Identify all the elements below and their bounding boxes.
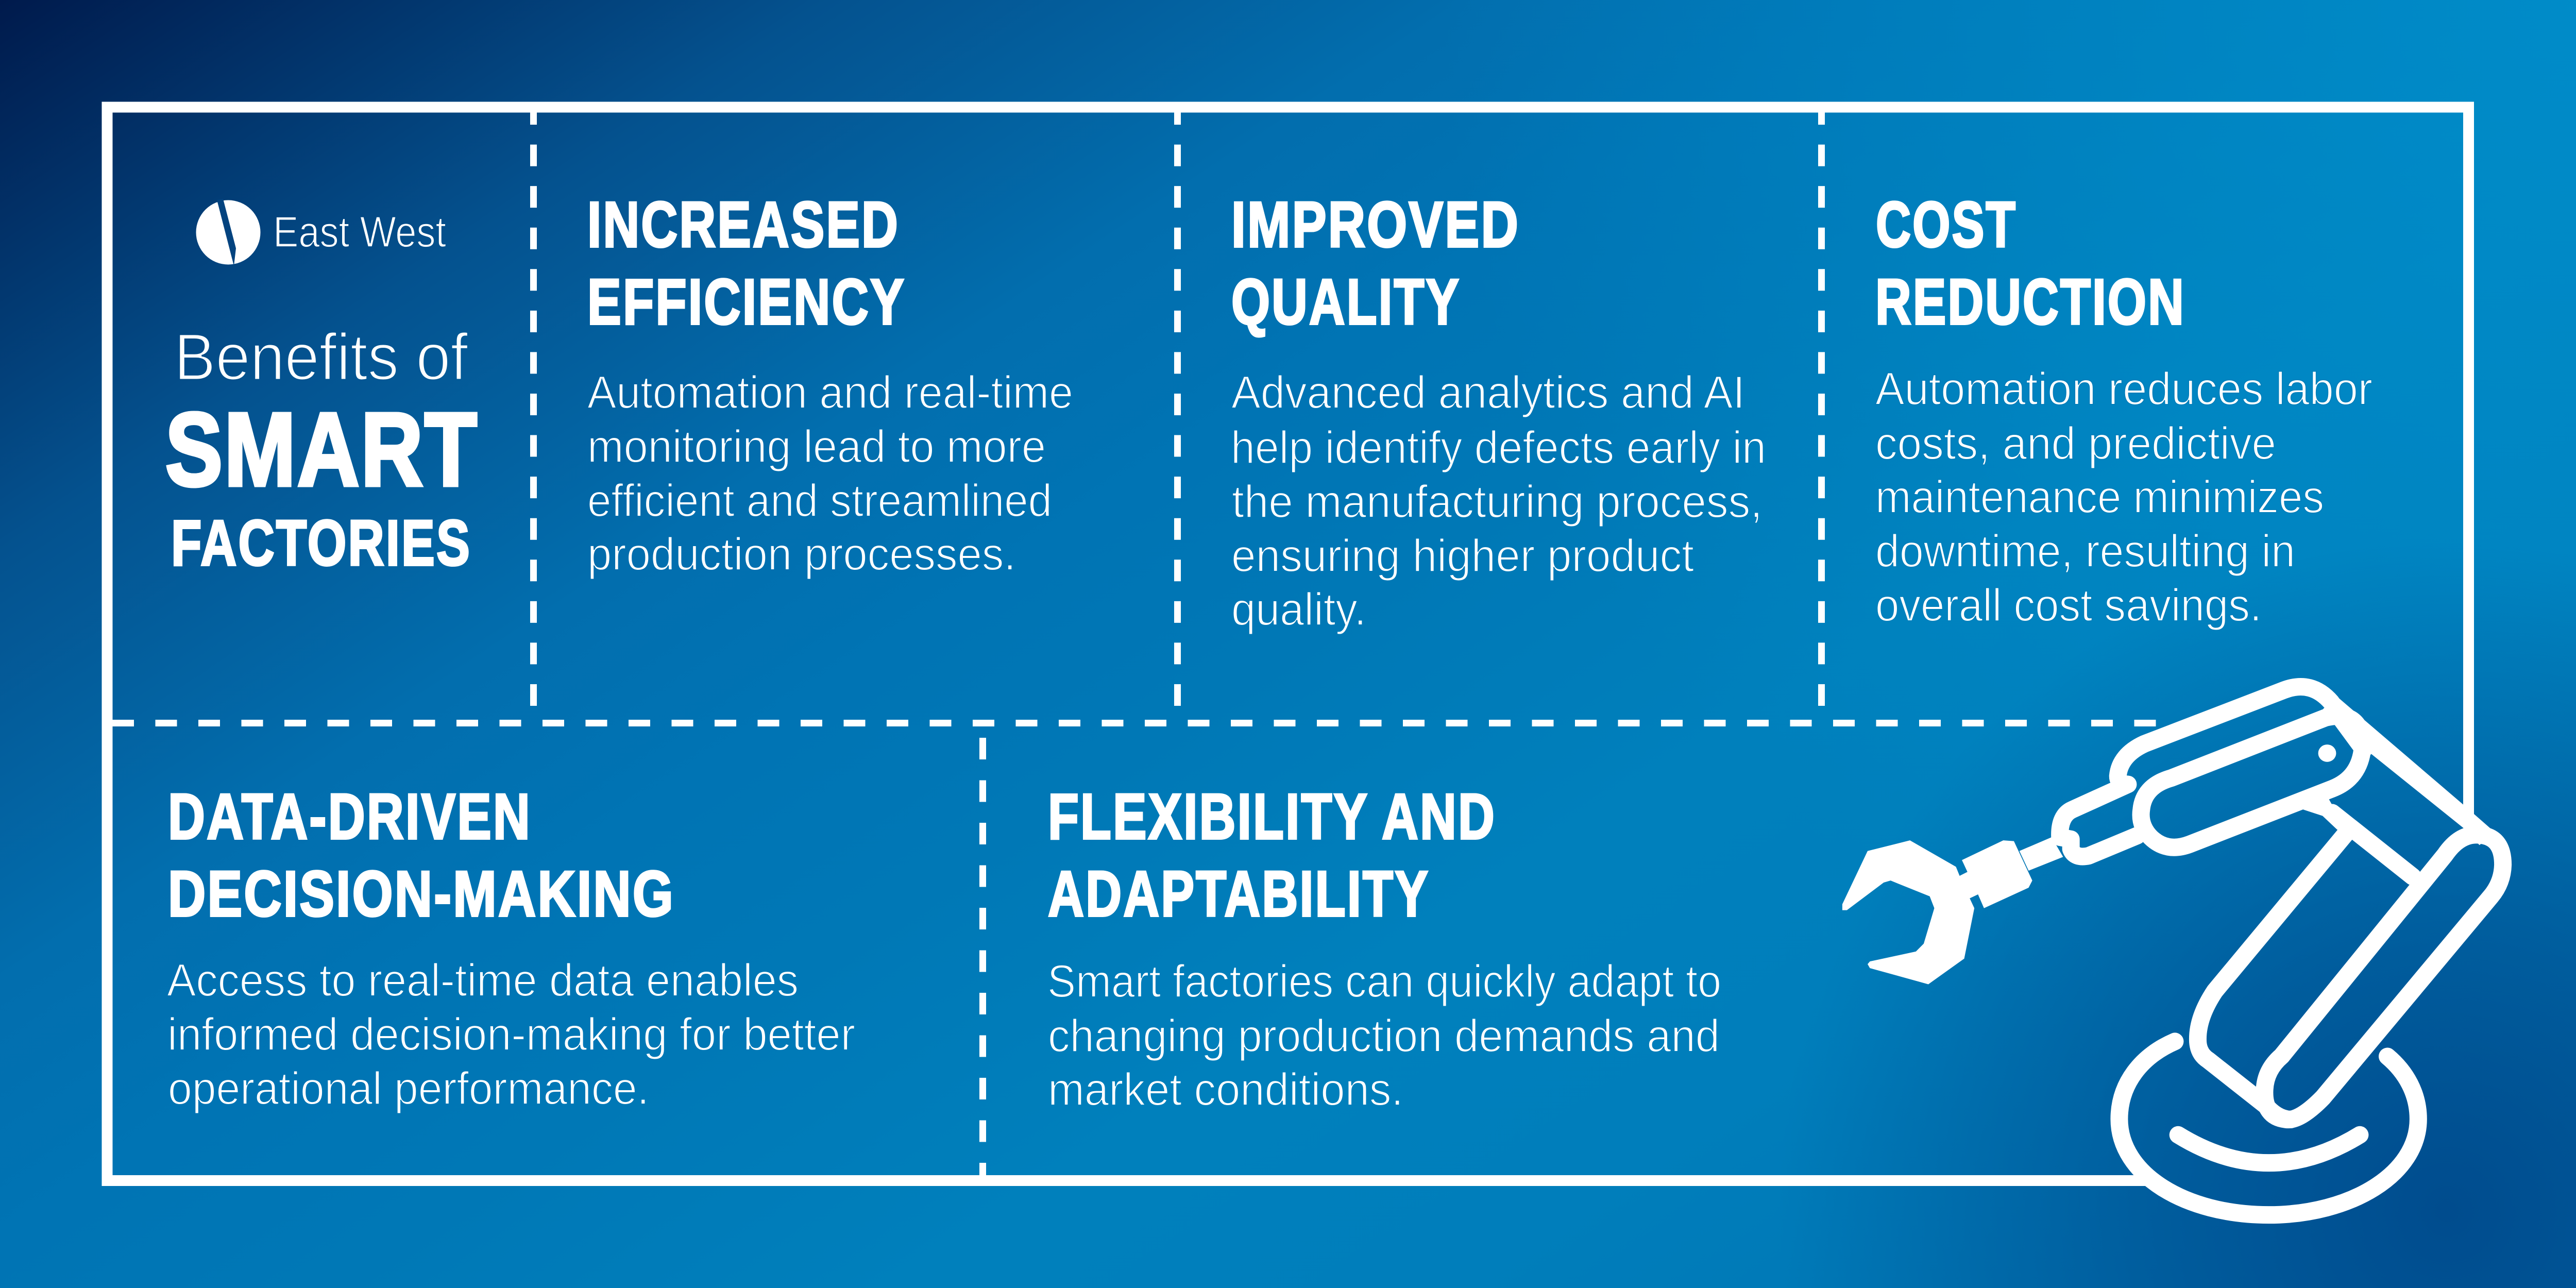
title: SMART: SMART bbox=[165, 391, 479, 507]
heading: FLEXIBILITY AND bbox=[1048, 781, 1496, 853]
body text: ensuring higher product bbox=[1231, 530, 1694, 581]
heading bbox=[168, 781, 675, 930]
logo wordmark: East West bbox=[273, 208, 446, 256]
body text: downtime, resulting in bbox=[1875, 525, 2295, 577]
robot left arm bbox=[2198, 835, 2345, 1120]
heading bbox=[1048, 781, 1496, 930]
body text: market conditions. bbox=[1048, 1063, 1403, 1115]
body text: production processes. bbox=[587, 528, 1016, 580]
body text bbox=[1875, 363, 2372, 631]
body text: operational performance. bbox=[168, 1062, 649, 1114]
icon: logo circle bbox=[196, 199, 261, 266]
body text: maintenance minimizes bbox=[1875, 471, 2324, 522]
heading bbox=[1231, 189, 1520, 338]
dashed grid dividers bbox=[112, 103, 2157, 1175]
panel: title bbox=[165, 199, 479, 579]
body text: Advanced analytics and AI bbox=[1231, 366, 1745, 418]
body text bbox=[1231, 366, 1766, 635]
body text: Smart factories can quickly adapt to bbox=[1047, 955, 1721, 1007]
panel: cost reduction bbox=[1875, 189, 2372, 631]
outer white frame bbox=[107, 107, 2469, 1181]
body text: informed decision-making for better bbox=[167, 1008, 855, 1060]
panel: data-driven decision-making bbox=[167, 781, 855, 1114]
heading: REDUCTION bbox=[1875, 266, 2185, 338]
robot pivot dot bbox=[2318, 744, 2336, 762]
panel: increased efficiency bbox=[587, 189, 1073, 580]
heading: IMPROVED bbox=[1231, 189, 1520, 261]
body text: the manufacturing process, bbox=[1232, 476, 1762, 527]
logo: East West bbox=[196, 199, 446, 266]
robot gripper claw bbox=[1842, 697, 2496, 984]
robot base bbox=[2119, 1041, 2418, 1215]
body text bbox=[167, 954, 855, 1114]
heading: QUALITY bbox=[1231, 266, 1461, 338]
heading: DATA-DRIVEN bbox=[168, 781, 532, 853]
icon: robot arm bbox=[1842, 687, 2503, 1215]
robot forearm capsule bbox=[2141, 716, 2363, 848]
body text: quality. bbox=[1231, 583, 1366, 635]
body text: Automation and real-time bbox=[587, 366, 1073, 418]
panel: improved quality bbox=[1231, 189, 1766, 635]
body text: changing production demands and bbox=[1048, 1010, 1720, 1061]
title: FACTORIES: FACTORIES bbox=[171, 507, 471, 579]
heading: DECISION-MAKING bbox=[168, 858, 675, 930]
body text: monitoring lead to more bbox=[587, 420, 1046, 472]
heading: INCREASED bbox=[587, 189, 900, 261]
robot base smile line bbox=[2178, 1135, 2360, 1163]
panel: flexibility and adaptability bbox=[1047, 781, 1721, 1115]
robot upper housing and wrist bbox=[2060, 687, 2331, 856]
title: Benefits of: Benefits of bbox=[174, 320, 468, 394]
body text: efficient and streamlined bbox=[587, 474, 1052, 526]
robot right arm capsule bbox=[2264, 835, 2503, 1120]
body text: help identify defects early in bbox=[1231, 421, 1766, 473]
robot shoulder brace bbox=[2332, 813, 2413, 877]
heading bbox=[587, 189, 906, 338]
heading: COST bbox=[1876, 189, 2017, 261]
body text: Automation reduces labor bbox=[1875, 363, 2372, 414]
heading: ADAPTABILITY bbox=[1048, 858, 1430, 930]
heading: EFFICIENCY bbox=[587, 266, 906, 338]
body text bbox=[587, 366, 1073, 580]
heading bbox=[1875, 189, 2185, 338]
body text: Access to real-time data enables bbox=[167, 954, 799, 1006]
body text: costs, and predictive bbox=[1875, 417, 2276, 469]
body text bbox=[1047, 955, 1721, 1115]
body text: overall cost savings. bbox=[1875, 579, 2262, 631]
